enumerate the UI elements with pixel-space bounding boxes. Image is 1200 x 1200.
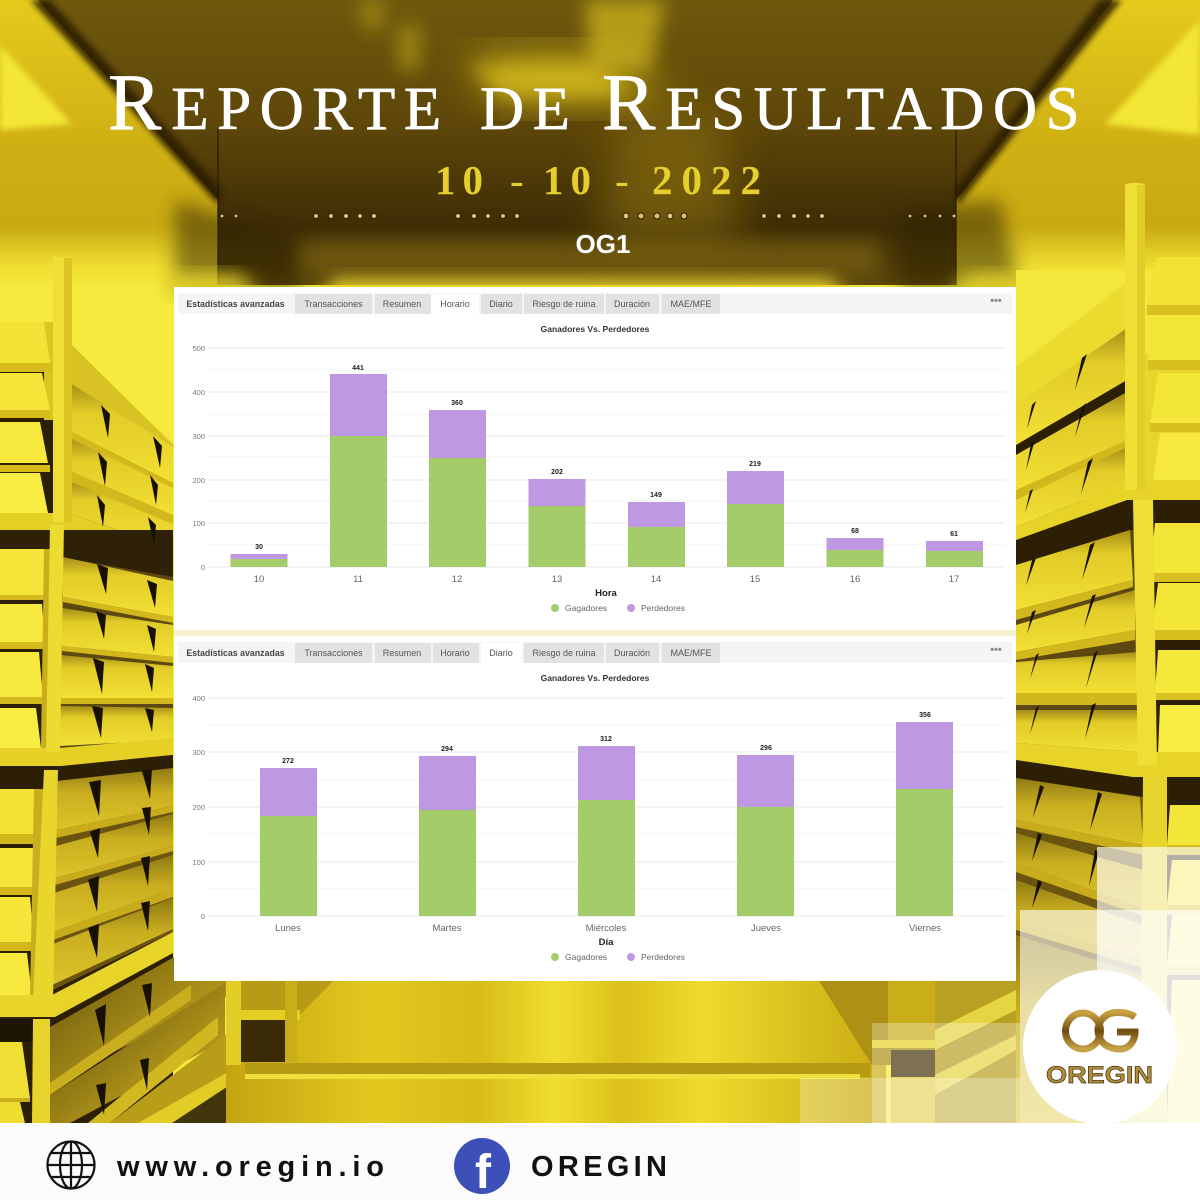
account label: OG1 <box>576 229 630 259</box>
bar values: hourly: 61 <box>950 531 958 538</box>
tabs: daily: MAE/MFE <box>670 648 712 658</box>
stacked bars: daily <box>260 722 953 916</box>
translucent white squares <box>800 847 1200 1123</box>
bar values: daily: 272 <box>282 758 294 765</box>
title: R <box>602 59 665 147</box>
y axis: 0 <box>201 912 205 921</box>
social handle: OREGIN <box>531 1151 667 1183</box>
tabs: daily: ••• <box>990 644 1002 656</box>
tabs: hourly: ••• <box>990 295 1002 307</box>
y axis: 300 <box>192 748 205 757</box>
x axis: days: Lunes <box>275 923 301 934</box>
date: - <box>510 157 524 203</box>
bar values: hourly: 441 <box>352 365 364 372</box>
bar values: daily: 356 <box>919 712 931 719</box>
icon: facebook <box>454 1138 510 1199</box>
bar values: daily <box>282 712 931 765</box>
legend: Gagadores <box>565 952 607 962</box>
x axis: hours <box>254 574 959 585</box>
date: 10 <box>435 157 490 203</box>
title: eporte <box>171 52 450 148</box>
tabs: hourly: Riesgo de ruina <box>532 299 596 309</box>
icon: globe <box>48 1142 94 1188</box>
icon: facebook: f <box>475 1146 492 1199</box>
left shelves <box>0 255 245 1123</box>
title: esultados <box>665 52 1088 148</box>
y axis <box>192 694 205 921</box>
bar values: hourly <box>255 365 958 551</box>
logo badge <box>1023 970 1177 1124</box>
y axis: 100 <box>192 858 205 867</box>
legend <box>551 952 685 962</box>
legend: Perdedores <box>641 603 685 613</box>
x axis: days: Viernes <box>909 923 941 934</box>
y axis: 200 <box>192 803 205 812</box>
bar values: daily: 294 <box>441 746 453 753</box>
panel: daily chart <box>174 636 1016 981</box>
y axis: 400 <box>192 694 205 703</box>
panel: hourly chart <box>174 287 1016 630</box>
x axis: hours: 17 <box>949 574 959 585</box>
legend: Perdedores <box>641 952 685 962</box>
stacked bars: hourly <box>230 374 983 567</box>
tabs: hourly: Resumen <box>383 299 421 309</box>
bar values: hourly: 360 <box>451 400 463 407</box>
tabs: hourly: Transacciones <box>304 299 363 309</box>
chart title: Ganadores Vs. Perdedores <box>541 324 650 334</box>
chart title: Ganadores Vs. Perdedores <box>541 673 650 683</box>
y axis: 200 <box>192 476 205 485</box>
date: - <box>615 157 629 203</box>
ceiling and upper walls <box>0 0 1200 300</box>
bar values: hourly: 202 <box>551 469 563 476</box>
tabs: daily: Diario <box>489 648 513 658</box>
x axis: hours: 16 <box>850 574 860 585</box>
tabs: daily <box>186 643 1002 663</box>
bar values: hourly: 219 <box>749 461 761 468</box>
bar values: daily: 296 <box>760 745 772 752</box>
icon: OG monogram <box>1066 1012 1135 1049</box>
website: www.oregin.io <box>116 1151 384 1183</box>
title: de <box>480 52 579 148</box>
axis title: Hora <box>595 588 618 599</box>
x axis: days <box>275 923 941 934</box>
date: 2022 <box>652 157 770 203</box>
tabs: hourly: Diario <box>489 299 513 309</box>
floor and far shelves <box>226 981 1016 1123</box>
y axis: 100 <box>192 519 205 528</box>
title: R <box>108 59 171 147</box>
tabs: hourly: Estadísticas avanzadas <box>186 299 285 309</box>
axis title: Día <box>599 937 614 948</box>
tabs: daily: Horario <box>440 648 470 658</box>
y axis: 500 <box>192 344 205 353</box>
tabs: hourly: MAE/MFE <box>670 299 712 309</box>
bar values: hourly: 30 <box>255 544 263 551</box>
ceiling lights row <box>220 213 956 219</box>
x axis: hours: 15 <box>750 574 760 585</box>
date: 10 <box>543 157 598 203</box>
x axis: days: Martes <box>432 923 462 934</box>
bar values: hourly: 68 <box>851 528 859 535</box>
y axis <box>192 344 205 572</box>
right shelves <box>1016 183 1200 1123</box>
bar values: hourly: 149 <box>650 492 662 499</box>
x axis: hours: 14 <box>651 574 661 585</box>
tabs: hourly: Horario <box>440 299 470 309</box>
tabs: daily: Duración <box>614 648 650 658</box>
logo wordmark: OREGIN <box>1046 1062 1153 1089</box>
x axis: hours: 11 <box>353 574 363 585</box>
tabs: daily: Estadísticas avanzadas <box>186 648 285 658</box>
legend: Gagadores <box>565 603 607 613</box>
y axis: 0 <box>201 563 205 572</box>
x axis: days: Miércoles <box>586 923 627 934</box>
tabs: daily: Transacciones <box>304 648 363 658</box>
x axis: hours: 12 <box>452 574 462 585</box>
tabs: daily: Resumen <box>383 648 421 658</box>
tabs: daily: Riesgo de ruina <box>532 648 596 658</box>
y axis: 400 <box>192 388 205 397</box>
tabs: hourly <box>186 294 1002 314</box>
bar values: daily: 312 <box>600 736 612 743</box>
footer band <box>0 1123 1200 1200</box>
y axis: 300 <box>192 432 205 441</box>
x axis: hours: 10 <box>254 574 264 585</box>
x axis: days: Jueves <box>751 923 781 934</box>
x axis: hours: 13 <box>552 574 562 585</box>
tabs: hourly: Duración <box>614 299 650 309</box>
legend <box>551 603 685 613</box>
